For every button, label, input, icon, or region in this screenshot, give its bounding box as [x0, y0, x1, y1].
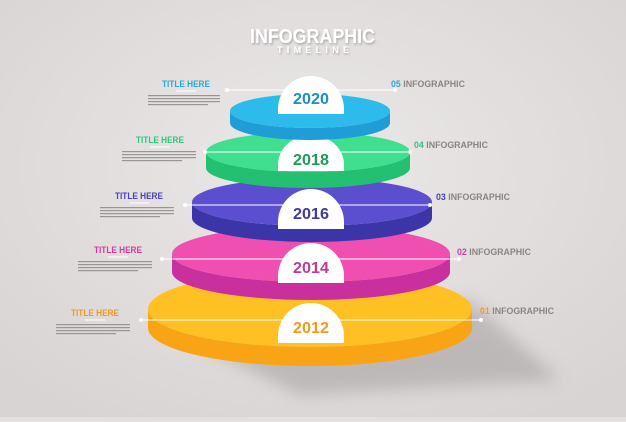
line: 2012 [139, 318, 483, 322]
title: TIMELINE [277, 45, 349, 55]
line: 2016 [183, 203, 432, 207]
badge: 2020: 2020 [293, 91, 329, 108]
left text: 2020: TITLE HERE [162, 79, 210, 89]
badge: 2014: 2014 [293, 260, 329, 277]
left text: 2012: TITLE HERE [71, 308, 119, 318]
disc: 2012 orange [148, 271, 472, 366]
line: 2014 [160, 257, 461, 261]
badge: 2012 [278, 303, 344, 343]
disc: 2014 pink [172, 226, 450, 300]
right labels: 04 INFOGRAPHIC [414, 140, 488, 150]
shadow [200, 300, 560, 395]
left text: 2014 [78, 245, 152, 271]
left text: 2016 [100, 191, 174, 217]
badge: 2016: 2016 [293, 206, 329, 223]
right labels: 01 INFOGRAPHIC [480, 306, 554, 316]
left text: 2018: TITLE HERE [136, 135, 184, 145]
right labels: 03 INFOGRAPHIC [436, 192, 510, 202]
badge: 2014 [278, 243, 344, 283]
title: INFOGRAPHIC [250, 26, 375, 48]
title [250, 26, 375, 55]
badge: 2012: 2012 [293, 320, 329, 337]
disc: 2016 purple [192, 178, 432, 242]
left text: 2020 [148, 79, 220, 105]
badge: 2016 [278, 189, 344, 229]
right labels: 02 INFOGRAPHIC [457, 247, 531, 257]
disc: 2018 green [206, 132, 410, 188]
left text: 2012 [56, 308, 130, 334]
disc: 2020 blue [230, 94, 390, 140]
left text: 2018 [122, 135, 196, 161]
line: 2018 [203, 150, 412, 154]
right labels [391, 79, 554, 316]
left text: 2016: TITLE HERE [115, 191, 163, 201]
badge: 2018: 2018 [293, 152, 329, 169]
left text: 2014: TITLE HERE [94, 245, 142, 255]
right labels: 05 INFOGRAPHIC [391, 79, 465, 89]
line: 2020 [225, 88, 397, 92]
badge: 2020 [278, 76, 344, 114]
badge: 2018 [278, 135, 344, 171]
